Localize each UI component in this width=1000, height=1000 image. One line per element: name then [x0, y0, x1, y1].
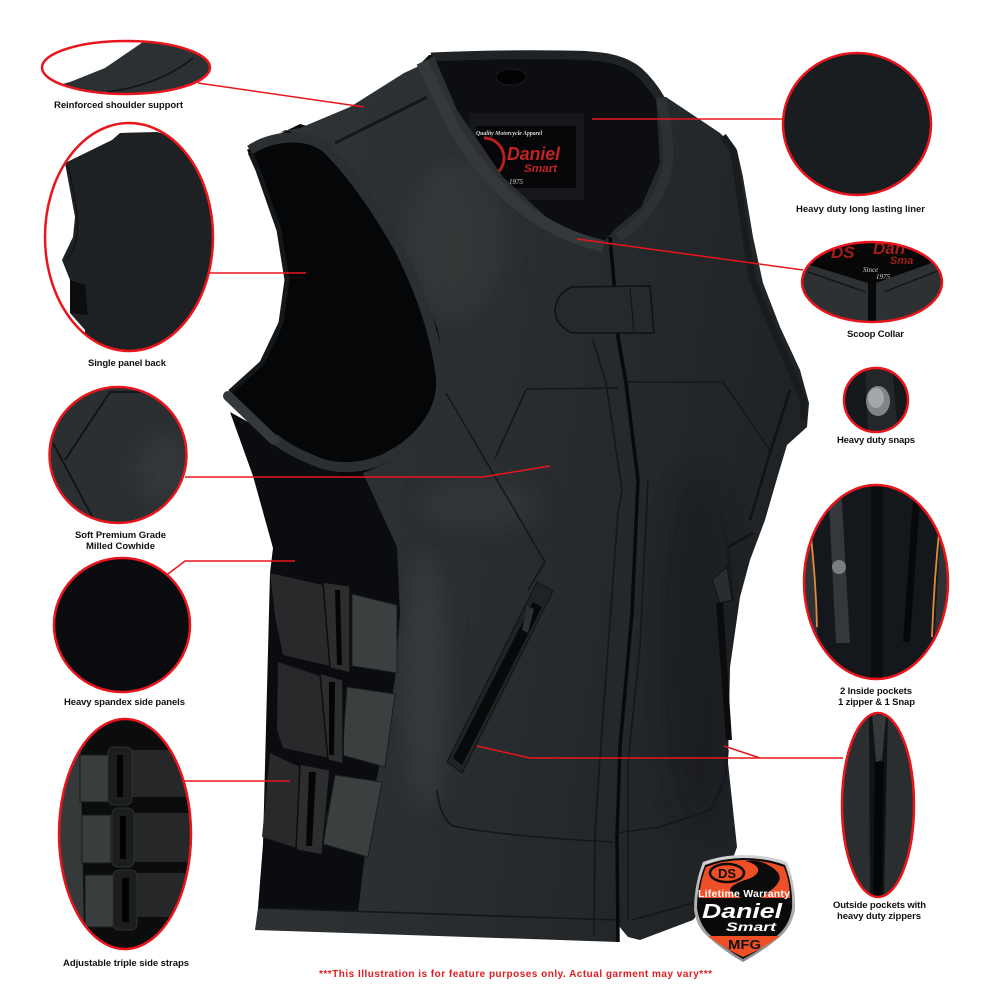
inner brand patch: Daniel [507, 144, 561, 164]
callout: milled cowhide: Soft Premium Grade [75, 530, 166, 541]
logo road [730, 861, 780, 898]
callout: long lasting liner: Heavy duty long lasting liner [796, 204, 925, 215]
back armhole rim [228, 396, 274, 440]
callout: triple side straps: Adjustable triple side straps [63, 958, 189, 969]
center zipper [610, 237, 638, 942]
callout: scoop collar [577, 235, 950, 340]
callout: scoop collar: DS [831, 243, 855, 262]
line to shoulder [198, 83, 364, 107]
callout: spandex side panels [54, 558, 295, 708]
line to back lining [210, 272, 306, 274]
shoulder stitching [335, 97, 427, 143]
left pocket zipper [447, 582, 553, 773]
line to pocket zippers [477, 746, 843, 758]
callout: reinforced shoulder support [40, 41, 364, 111]
callout: inside pockets: 1 zipper & 1 Snap [838, 697, 915, 708]
velcro tab [555, 286, 654, 333]
callout: inside pockets: 2 Inside pockets [840, 686, 912, 697]
callout: scoop collar: Since [863, 266, 878, 274]
callout: spandex side panels: Heavy spandex side panels [64, 697, 185, 708]
footer disclaimer: ***This Illustration is for feature purposes only. Actual garment may vary*** [319, 969, 712, 980]
callout: single panel back: Single panel back [88, 358, 167, 369]
logo smart: Smart [726, 920, 777, 934]
callout: scoop collar: Sma [890, 255, 913, 267]
line to collar [577, 239, 803, 270]
callout: scoop collar: Scoop Collar [847, 329, 904, 340]
callout: reinforced shoulder support: Reinforced shoulder support [54, 100, 184, 111]
side strap 3 [262, 753, 382, 857]
back collar rim [431, 55, 661, 100]
logo daniel: Daniel [702, 901, 783, 923]
logo orange top [699, 860, 790, 898]
yoke seams [258, 340, 770, 935]
callout: heavy duty snaps: Heavy duty snaps [837, 435, 915, 446]
line to spandex [168, 561, 295, 574]
callout: scoop collar: Dan [873, 239, 905, 258]
leather front body [247, 56, 809, 942]
vest [228, 53, 809, 942]
callout: milled cowhide: Milled Cowhide [86, 541, 155, 552]
neck rim right [618, 98, 668, 238]
leather shading [403, 160, 740, 830]
side strap 1 [270, 573, 397, 673]
line to straps [183, 780, 290, 782]
callout: outside pockets [477, 710, 926, 922]
callout: single panel back [45, 123, 306, 369]
callout: outside pockets: heavy duty zippers [837, 911, 921, 922]
armhole rim [250, 137, 441, 467]
inner brand patch [469, 113, 584, 200]
callout: outside pockets: Outside pockets with [833, 900, 926, 911]
logo DS oval: DS [718, 866, 736, 881]
inner brand patch: 1975 [509, 178, 524, 186]
back collar snap [496, 69, 526, 85]
callout: long lasting liner [592, 53, 931, 215]
inner brand patch: Smart [524, 163, 558, 175]
callout: inside pockets [800, 480, 952, 708]
inner brand patch: Quality Motorcycle Apparel [476, 131, 543, 137]
right armhole rim [723, 136, 803, 420]
inner brand patch: S [482, 154, 490, 166]
logo lifetime warranty: Lifetime Warranty [698, 888, 790, 900]
back outer rim [230, 152, 287, 392]
back lining [228, 124, 452, 476]
line to front panel [185, 466, 550, 477]
callout: triple side straps [55, 715, 290, 969]
collar liner [417, 53, 676, 252]
logo mfg text: MFG [728, 937, 761, 952]
side rim inner edge [728, 390, 790, 547]
logo mfg band [708, 936, 780, 957]
callout: scoop collar: 1975 [876, 273, 890, 281]
spandex side panel [230, 412, 430, 913]
callout: milled cowhide [45, 380, 550, 552]
side strap 2 [277, 662, 395, 767]
right pocket zipper [712, 567, 732, 740]
logo shield [694, 855, 795, 962]
line to liner [592, 118, 783, 120]
callout: heavy duty snaps [837, 365, 915, 446]
neck rim left [422, 62, 603, 246]
